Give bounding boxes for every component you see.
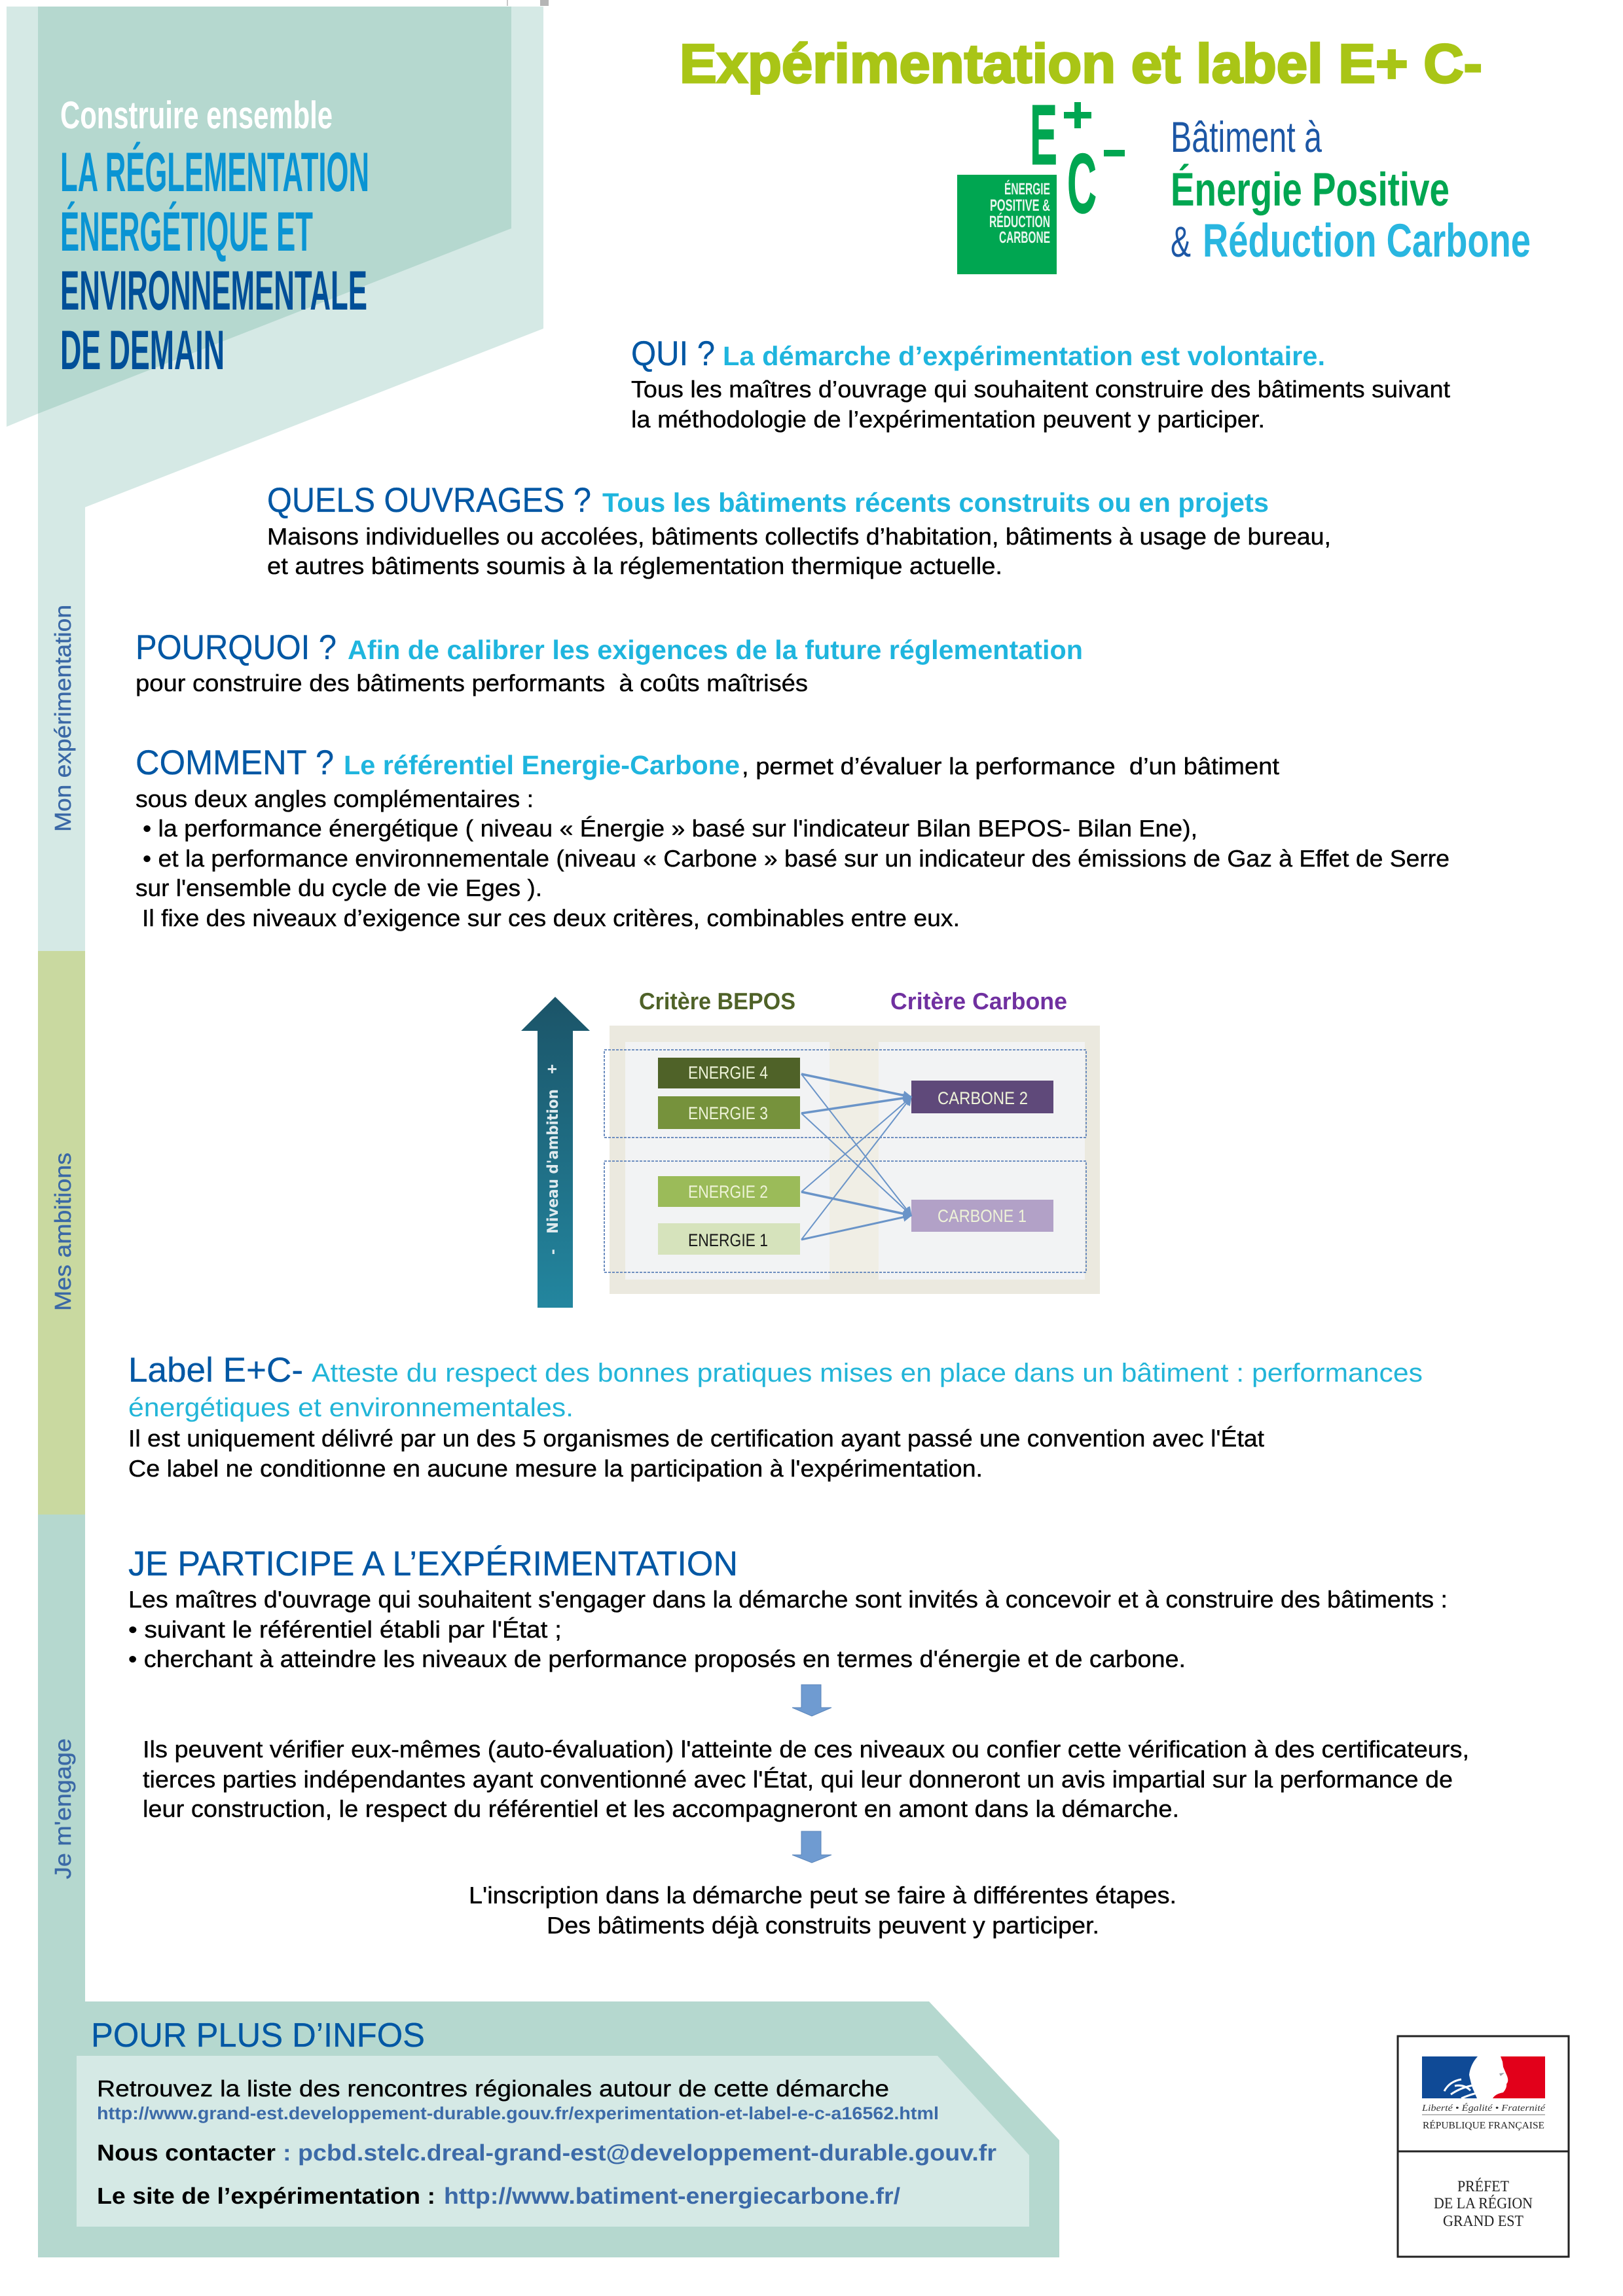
text block: inscription (469, 1882, 1176, 1939)
banner panel: light background shape (7, 7, 543, 951)
section: COMMENT (136, 744, 1450, 931)
kicker: Construire ensemble: Construire ensemble (60, 94, 333, 137)
heading QUI: QUI ? (631, 334, 715, 373)
box CARBONE 2 (911, 1081, 1053, 1113)
motto: Liberté • Égalité • Fraternité (1421, 2102, 1546, 2113)
ambition arrow (521, 997, 590, 1308)
minus sign (1104, 150, 1125, 156)
logo: E+C- mark: C (1067, 135, 1097, 231)
side label: Mon expérimentation: Mon expérimentation (50, 605, 76, 832)
section: COMMENT: sur l'ensemble du cycle de vie Eges ). (136, 874, 542, 901)
section: POURQUOI (136, 628, 1083, 696)
section: Je participe: • suivant le référentiel établi par l'État ; (128, 1616, 562, 1643)
square caption: RÉDUCTION (989, 212, 1050, 231)
chart background (610, 1026, 1100, 1294)
body COMMENT: , permet d’évaluer la performance d’un bâtiment (742, 753, 1279, 780)
box ENERGIE 3 (658, 1096, 800, 1129)
préfet text: DE LA RÉGION (1434, 2195, 1533, 2212)
body POURQUOI: pour construire des bâtiments performants à coûts maîtrisés (136, 670, 808, 696)
logo frame (1398, 2036, 1569, 2257)
square caption: CARBONE (999, 228, 1050, 247)
column header: Critère Carbone: Critère Carbone (890, 988, 1067, 1014)
lead QUELS OUVRAGES: Tous les bâtiments récents construits ou en projets (602, 488, 1269, 518)
text block: inscription: L'inscription dans la démarche peut se faire à différentes étapes. (469, 1882, 1176, 1909)
panel outer shape (38, 2001, 1059, 2257)
text block: vérification: leur construction, le respect du référentiel et les accompagneront en amont dans la démarche. (143, 1795, 1179, 1822)
body QUELS OUVRAGES: Maisons individuelles ou accolées, bâtiments collectifs d’habitation, bâtiments à usage de bureau, (267, 523, 1331, 550)
section: Label E+C-: Ce label ne conditionne en aucune mesure la participation à l'expérimentation. (128, 1455, 983, 1482)
ambition arrow: - (542, 1249, 562, 1255)
section: QUELS OUVRAGES (267, 481, 1331, 579)
section: COMMENT: sous deux angles complémentaires : (136, 785, 534, 812)
heading POURQUOI: POURQUOI ? (136, 628, 337, 667)
box ENERGIE 2: ENERGIE 2 (688, 1182, 768, 1202)
heading Je participe: JE PARTICIPE A L’EXPÉRIMENTATION (128, 1545, 738, 1583)
main title: Expérimentation et label E+ C- (680, 33, 1482, 94)
arrow: down 1 (792, 1685, 831, 1716)
text block: vérification (143, 1736, 1469, 1822)
side label: Je m'engage: Je m'engage (50, 1738, 76, 1879)
contact label: Nous contacter (97, 2140, 276, 2166)
title line 4: DE DEMAIN (60, 319, 225, 382)
title line 2: ÉNERGÉTIQUE ET (60, 201, 313, 263)
flag with Marianne (1422, 2056, 1545, 2098)
section: COMMENT: • la performance énergétique ( niveau « Énergie » basé sur l'indicateur Bilan BEPOS- Bilan Ene), (143, 815, 1197, 842)
square caption: ÉNERGIE (1004, 179, 1050, 198)
body QUI: Tous les maîtres d’ouvrage qui souhaitent construire des bâtiments suivant (631, 376, 1450, 403)
lead POURQUOI: Afin de calibrer les exigences de la future réglementation (348, 635, 1083, 665)
side band: Mes ambitions (38, 951, 85, 1515)
side band: Je m'engage (38, 1515, 85, 2012)
text block: vérification: Ils peuvent vérifier eux-mêmes (auto-évaluation) l'atteinte de ces niveaux ou confier cette vérification à des certificateurs, (143, 1736, 1469, 1763)
panel: pour plus d'infos (38, 2001, 1059, 2257)
section: COMMENT: Il fixe des niveaux d’exigence sur ces deux critères, combinables entre eux. (142, 905, 960, 931)
body Label: Il est uniquement délivré par un des 5 organismes de certification ayant passé une convention avec l'État (128, 1425, 1264, 1452)
arrow: down 2 (792, 1831, 831, 1863)
wordmark line 2: Énergie Positive (1171, 164, 1450, 216)
connector arrows (801, 1074, 911, 1240)
plus sign (1064, 102, 1091, 128)
logo: E+C- mark (957, 86, 1125, 274)
panel heading: POUR PLUS D’INFOS (91, 2017, 425, 2054)
section: Label E+C- (128, 1351, 1423, 1482)
box ENERGIE 4: ENERGIE 4 (688, 1063, 768, 1083)
panel inner shape (77, 2056, 1029, 2227)
heading COMMENT: COMMENT ? (136, 744, 334, 782)
box ENERGIE 4 (658, 1058, 800, 1088)
section: Je participe: • cherchant à atteindre les niveaux de performance proposés en termes d'énergie et de carbone. (128, 1645, 1186, 1672)
box CARBONE 1 (911, 1200, 1053, 1232)
rencontres link: http://www.grand-est.developpement-durable.gouv.fr/experimentation-et-label-e-c-a16562.html (97, 2104, 939, 2123)
préfet text (1434, 2178, 1533, 2230)
préfet text: PRÉFET (1457, 2178, 1509, 2195)
upper dashed group (604, 1050, 1086, 1138)
préfet text: GRAND EST (1443, 2213, 1523, 2230)
box ENERGIE 3: ENERGIE 3 (688, 1103, 768, 1123)
logo: E+C- mark: E (1030, 86, 1057, 183)
rencontres text: Retrouvez la liste des rencontres régionales autour de cette démarche (97, 2076, 889, 2102)
website link: http://www.batiment-energiecarbone.fr/ (444, 2183, 900, 2209)
column header: Critère BEPOS: Critère BEPOS (639, 988, 795, 1014)
wordmark ampersand: & (1171, 217, 1191, 266)
square caption (989, 179, 1050, 247)
title line 1: LA RÉGLEMENTATION (60, 141, 369, 204)
ambition arrow: + (542, 1064, 562, 1074)
section: Label E+C-: énergétiques et environnementales. (128, 1393, 574, 1422)
section: QUELS OUVRAGES: et autres bâtiments soumis à la réglementation thermique actuelle. (267, 552, 1002, 579)
title line 3: ENVIRONNEMENTALE (60, 260, 367, 322)
box CARBONE 2: CARBONE 2 (938, 1088, 1028, 1108)
box CARBONE 1: CARBONE 1 (938, 1206, 1027, 1226)
lead COMMENT: Le référentiel Energie-Carbone (344, 750, 740, 780)
text block: vérification: tierces parties indépendantes ayant conventionné avec l'État, qui leur donneront un avis impartial sur la performance de (143, 1766, 1453, 1793)
heading QUELS OUVRAGES: QUELS OUVRAGES ? (267, 481, 591, 520)
wordmark line 1: Bâtiment à (1171, 113, 1322, 161)
section: QUI: la méthodologie de l’expérimentation peuvent y participer. (631, 406, 1265, 433)
république française: RÉPUBLIQUE FRANÇAISE (1423, 2120, 1544, 2131)
chart: critères BEPOS et Carbone (521, 988, 1100, 1308)
logo: Préfet de la région Grand Est (1398, 2036, 1569, 2257)
section: QUI (631, 334, 1450, 433)
website label: Le site de l’expérimentation : (97, 2183, 435, 2209)
ambition arrow label: Niveau d'ambition (545, 1089, 562, 1234)
body Je participe: Les maîtres d'ouvrage qui souhaitent s'engager dans la démarche sont invités à concevoir et à construire des bâtiments : (128, 1586, 1448, 1613)
square caption: POSITIVE & (990, 196, 1050, 215)
contact email: : pcbd.stelc.dreal-grand-est@developpement-durable.gouv.fr (283, 2140, 996, 2166)
lead Label: Atteste du respect des bonnes pratiques mises en place dans un bâtiment : performances (312, 1359, 1423, 1388)
logo wordmark (1171, 113, 1531, 267)
section: COMMENT: • et la performance environnementale (niveau « Carbone » basé sur un indicateur des émissions de Gaz à Effet de Serre (143, 845, 1450, 872)
banner title (60, 94, 369, 382)
banner panel: darker overlay shape (38, 7, 511, 414)
box ENERGIE 2 (658, 1176, 800, 1207)
lead QUI: La démarche d’expérimentation est volontaire. (723, 341, 1325, 371)
side label: Mes ambitions: Mes ambitions (50, 1153, 76, 1311)
green square (957, 175, 1057, 274)
box ENERGIE 1: ENERGIE 1 (688, 1230, 768, 1250)
section: Je participe (128, 1545, 1448, 1672)
text block: inscription: Des bâtiments déjà construits peuvent y participer. (547, 1912, 1099, 1939)
heading Label E+C-: Label E+C- (128, 1351, 303, 1390)
box ENERGIE 1 (658, 1223, 800, 1255)
lower dashed group (604, 1161, 1086, 1272)
